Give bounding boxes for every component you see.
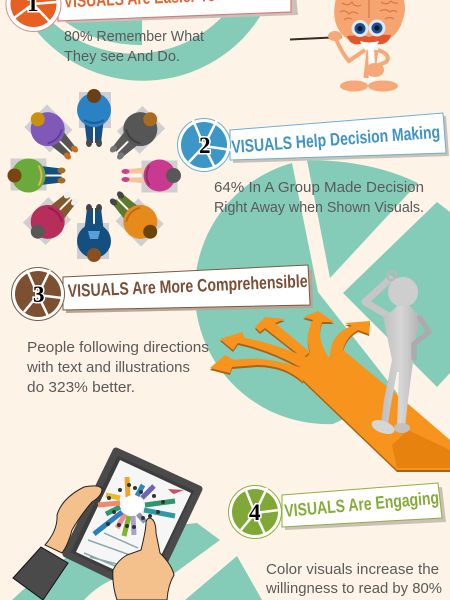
badge 1 (6, 0, 61, 32)
brain head (334, 0, 405, 43)
arrow: right (330, 321, 370, 357)
people circle illustration (8, 89, 181, 262)
icon: thinking grey figure (365, 272, 429, 437)
hip arm (414, 318, 429, 358)
pointer stick (290, 37, 342, 40)
icon: hands holding tablet (13, 451, 199, 600)
text: stat 3 (26, 339, 209, 396)
tablet body (66, 451, 199, 594)
person: green (8, 158, 66, 192)
body and legs (381, 306, 421, 428)
icon: brain character with pointer (290, 0, 405, 92)
chart: middle teal pie (195, 160, 450, 424)
person: navy (77, 204, 111, 262)
arrow: diagonal (255, 317, 310, 358)
person: blue (77, 89, 111, 147)
screen: wheel dots (106, 483, 165, 529)
text: stat 3: with text and illustrations (26, 359, 190, 376)
tablet screen (76, 460, 191, 585)
heading 3: VISUALS Are More Comprehensible (67, 271, 308, 301)
person: purple (21, 102, 86, 167)
text: stat 2 (214, 179, 424, 216)
arrow: top (303, 311, 334, 356)
chart: top teal pie ring (28, 0, 264, 81)
text: stat 1 (64, 28, 205, 65)
road (300, 350, 450, 470)
banner 1 (58, 0, 298, 23)
screen: radial wheel chart (94, 477, 175, 536)
banner 4 (282, 483, 446, 530)
face (347, 35, 391, 44)
feet (370, 417, 396, 437)
number 3: 3 (33, 282, 44, 307)
text: stat 1: They see And Do. (64, 48, 180, 65)
person: crimson (21, 184, 86, 249)
person: orange (102, 184, 167, 249)
banner 3 (63, 265, 313, 313)
right hand (113, 518, 174, 600)
text: stat 1: 80% Remember What (64, 28, 205, 45)
badge 2 (178, 118, 231, 172)
road reflection (392, 430, 450, 468)
raised arm (365, 279, 392, 318)
arrow: upper left (220, 332, 308, 367)
text: stat 4: willingness to read by 80% (265, 580, 442, 597)
text: stat 3: do 323% better. (27, 379, 135, 396)
chart: bottom teal pie (12, 523, 262, 600)
number 2: 2 (199, 133, 210, 158)
person: grey suit (102, 102, 167, 167)
number 4: 4 (249, 500, 261, 525)
text: stat 2: Right Away when Shown Visuals. (214, 199, 424, 216)
banner 2 (230, 113, 449, 163)
text: stat 4: Color visuals increase the (266, 561, 439, 578)
screen: lower bars (84, 533, 138, 568)
badge 3 (12, 268, 64, 320)
arrow: far left (210, 355, 303, 382)
left sleeve (13, 547, 68, 600)
left hand (45, 486, 102, 553)
text: stat 3: People following directions (27, 339, 209, 356)
text: stat 4 (265, 561, 442, 597)
arrow: orange road with five branching arrows (210, 311, 450, 470)
badge 4 (228, 486, 282, 538)
head (388, 277, 418, 307)
person: magenta (122, 160, 181, 192)
text: stat 2: 64% In A Group Made Decision (214, 179, 424, 196)
